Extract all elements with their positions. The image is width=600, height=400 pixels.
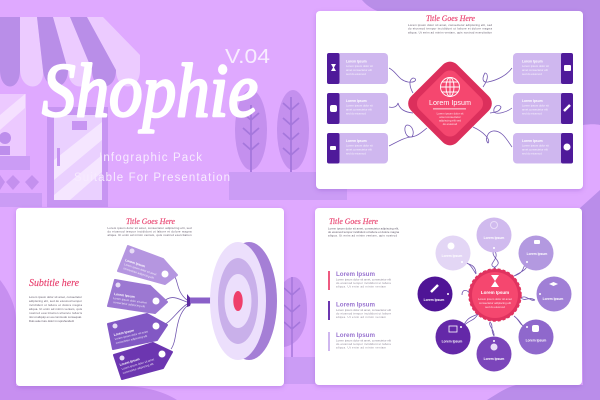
node: lower left bbox=[436, 320, 470, 354]
node: right: Lorem Ipsum bbox=[543, 297, 563, 301]
heading: Title Goes Here bbox=[426, 14, 475, 23]
body text: nisi ut aliquip ex ea commodo consequat. bbox=[29, 315, 82, 319]
card: left top: amet consectetur elit bbox=[346, 68, 372, 72]
card: right bottom: Lorem ipsum dolor sit bbox=[522, 144, 549, 148]
tag 3: Lorem ipsum dolor sit amet bbox=[114, 329, 148, 341]
node: lower right bbox=[518, 320, 554, 354]
node: lower left: Lorem Ipsum bbox=[442, 340, 462, 344]
tag 4 bbox=[114, 343, 172, 379]
body text: nostrud exercitation ullamco laboris bbox=[29, 311, 83, 315]
body text bbox=[29, 295, 83, 323]
connectors bbox=[461, 250, 535, 336]
card: right bottom: Lorem Ipsum bbox=[522, 139, 543, 143]
tag 4: Lorem Ipsum bbox=[119, 357, 140, 367]
node: top: Lorem Ipsum bbox=[484, 236, 504, 240]
description bbox=[328, 226, 399, 238]
list item 3: do eiusmod tempor incididunt ut labore bbox=[336, 342, 391, 346]
card: left top: sed do eiusmod bbox=[346, 72, 366, 76]
card: right top: amet consectetur elit bbox=[522, 68, 548, 72]
card: left bottom: amet consectetur elit bbox=[346, 148, 372, 152]
tag 1 bbox=[118, 246, 177, 284]
callout: center badge: Lorem ipsum dolor sit amet bbox=[478, 297, 512, 301]
description: do eiusmod tempor incididunt ut labore et dolore magna bbox=[328, 230, 399, 234]
callout: center diamond: Lorem ipsum dolor sit bbox=[437, 112, 464, 116]
tag 3: consectetur adipiscing elit bbox=[115, 334, 148, 345]
list item 1: Lorem ipsum dolor sit amet, consectetur elit bbox=[336, 278, 391, 282]
connectors bbox=[389, 68, 512, 147]
card: left bottom: sed do eiusmod bbox=[346, 152, 366, 156]
card: right middle: amet consectetur elit bbox=[522, 108, 548, 112]
description: aliqua. Ut enim ad minim veniam, quis nostrud exercitation bbox=[108, 233, 192, 237]
list item 3: Lorem Ipsum bbox=[336, 333, 375, 339]
card: right bottom bbox=[513, 133, 573, 164]
node: bottom bbox=[476, 336, 512, 372]
description: do eiusmod tempor incididunt ut labore et dolore magna bbox=[408, 27, 492, 31]
card: right bottom: amet consectetur elit bbox=[522, 148, 548, 152]
list item 3: aliqua. Ut enim ad minim veniam bbox=[336, 346, 387, 350]
tag 4: Lorem ipsum dolor sit amet bbox=[121, 357, 155, 371]
card: right middle bbox=[513, 93, 573, 124]
card: left middle bbox=[327, 93, 388, 124]
tag 4: consectetur adipiscing elit bbox=[122, 362, 154, 375]
description: aliqua. Ut enim ad minim veniam, quis nostrud exercitation bbox=[408, 30, 492, 34]
tag 2 bbox=[108, 280, 167, 313]
description bbox=[108, 226, 192, 237]
callout: center diamond: adipiscing elit sed bbox=[439, 118, 461, 122]
subtitle: Subtitle here bbox=[29, 278, 79, 289]
tag 1: Lorem Ipsum bbox=[125, 258, 146, 268]
node: upper right bbox=[518, 236, 554, 270]
card: left middle: Lorem Ipsum bbox=[346, 99, 367, 103]
list item 1 bbox=[328, 271, 391, 290]
card: left top: Lorem Ipsum bbox=[346, 60, 367, 64]
panel: circle infographic bbox=[315, 208, 582, 385]
description bbox=[408, 23, 492, 34]
node: lower right: Lorem Ipsum bbox=[526, 338, 546, 342]
card: left bottom: Lorem Ipsum bbox=[346, 139, 367, 143]
card: right bottom: sed do eiusmod bbox=[522, 152, 542, 156]
callout: center diamond bbox=[404, 58, 496, 149]
tag 2: Lorem Ipsum bbox=[114, 292, 135, 299]
connectors bbox=[161, 273, 187, 349]
panel: diamond infographic bbox=[316, 11, 583, 189]
target bbox=[210, 242, 277, 360]
card: right top: Lorem Ipsum bbox=[522, 60, 543, 64]
description: Lorem ipsum dolor sit amet, consectetur adipiscing elit, sed bbox=[408, 23, 492, 27]
list item 2: Lorem ipsum dolor sit amet, consectetur elit bbox=[336, 308, 391, 312]
tag 3 bbox=[108, 314, 167, 349]
card: left top bbox=[327, 53, 388, 84]
body text: adipiscing elit, sed do eiusmod tempor bbox=[29, 299, 82, 303]
tagline: Infographic Pack bbox=[99, 152, 202, 164]
node: upper right: Lorem Ipsum bbox=[527, 252, 547, 256]
heading: Title Goes Here bbox=[126, 217, 175, 226]
card: left middle: sed do eiusmod bbox=[346, 112, 366, 116]
list item 2: Lorem Ipsum bbox=[336, 302, 375, 308]
description: Lorem ipsum dolor sit amet, consectetur adipiscing elit, bbox=[328, 226, 399, 230]
heading: Title Goes Here bbox=[329, 217, 378, 226]
tag 3: Lorem Ipsum bbox=[113, 328, 134, 337]
list item 1: Lorem Ipsum bbox=[336, 272, 375, 278]
list item 2 bbox=[328, 301, 391, 320]
tag 1: consectetur adipiscing elit bbox=[123, 266, 155, 280]
description: Lorem ipsum dolor sit amet, consectetur adipiscing elit, sed bbox=[108, 226, 192, 230]
body text: incididunt ut labore et dolore magna bbox=[29, 303, 82, 307]
list item 1: aliqua. Ut enim ad minim veniam bbox=[336, 284, 387, 288]
callout: center diamond: amet consectetur bbox=[439, 115, 461, 119]
list item 3: Lorem ipsum dolor sit amet, consectetur elit bbox=[336, 338, 391, 342]
card: left bottom: Lorem ipsum dolor sit bbox=[346, 144, 373, 148]
dart bbox=[187, 294, 225, 307]
card: right top bbox=[513, 53, 573, 84]
card: left middle: Lorem ipsum dolor sit bbox=[346, 104, 373, 108]
list item 1: do eiusmod tempor incididunt ut labore bbox=[336, 281, 391, 285]
list item 2: do eiusmod tempor incididunt ut labore bbox=[336, 312, 391, 316]
description: do eiusmod tempor incididunt ut labore et dolore magna bbox=[108, 230, 192, 234]
body text: Lorem ipsum dolor sit amet, consectetur bbox=[29, 295, 82, 299]
node: left: Lorem Ipsum bbox=[424, 298, 444, 302]
list item 3 bbox=[328, 332, 391, 351]
card: right top: Lorem ipsum dolor sit bbox=[522, 64, 549, 68]
callout: center diamond: Lorem Ipsum bbox=[429, 98, 471, 107]
node: bottom: Lorem Ipsum bbox=[484, 357, 504, 361]
card: right middle: Lorem ipsum dolor sit bbox=[522, 104, 549, 108]
card: left top: Lorem ipsum dolor sit bbox=[346, 64, 373, 68]
card: right top: sed do eiusmod bbox=[522, 72, 542, 76]
card: left bottom bbox=[327, 133, 388, 164]
tagline: Suitable For Presentation bbox=[74, 172, 230, 184]
card: right middle: Lorem Ipsum bbox=[522, 99, 543, 103]
callout: center badge: consectetur adipiscing elit bbox=[479, 301, 511, 305]
list item 2: aliqua. Ut enim ad minim veniam bbox=[336, 315, 387, 319]
node: top bbox=[476, 218, 512, 252]
title: Shophie: Shophie bbox=[42, 49, 258, 133]
tag 2: Lorem ipsum dolor sit amet bbox=[113, 296, 147, 305]
tag 2: consectetur adipiscing elit bbox=[113, 300, 145, 308]
panel: target infographic bbox=[16, 208, 284, 386]
node: upper left: Lorem Ipsum bbox=[442, 254, 462, 258]
callout: center badge: sed do eiusmod bbox=[485, 305, 505, 309]
card: right middle: sed do eiusmod bbox=[522, 112, 542, 116]
card: left middle: amet consectetur elit bbox=[346, 108, 372, 112]
illustration: trees bbox=[229, 90, 347, 200]
tagline bbox=[74, 152, 230, 184]
callout: center badge bbox=[469, 269, 521, 321]
icon: globe bbox=[440, 78, 460, 96]
body text: Duis aute irure dolor in reprehenderit bbox=[29, 319, 74, 323]
illustration: shop bbox=[0, 17, 140, 207]
tag 1: Lorem ipsum dolor sit amet bbox=[124, 262, 157, 276]
description: aliqua. Ut enim ad minim veniam, quis nostrud bbox=[328, 234, 397, 238]
body text: aliqua. Ut enim ad minim veniam, quis bbox=[29, 307, 83, 311]
node: upper left bbox=[436, 236, 470, 270]
version label: V.04 bbox=[225, 46, 270, 68]
callout: center diamond: do eiusmod bbox=[443, 122, 458, 126]
node: left bbox=[418, 276, 452, 312]
node: right bbox=[536, 276, 572, 312]
callout: center badge: Lorem Ipsum bbox=[481, 290, 509, 295]
